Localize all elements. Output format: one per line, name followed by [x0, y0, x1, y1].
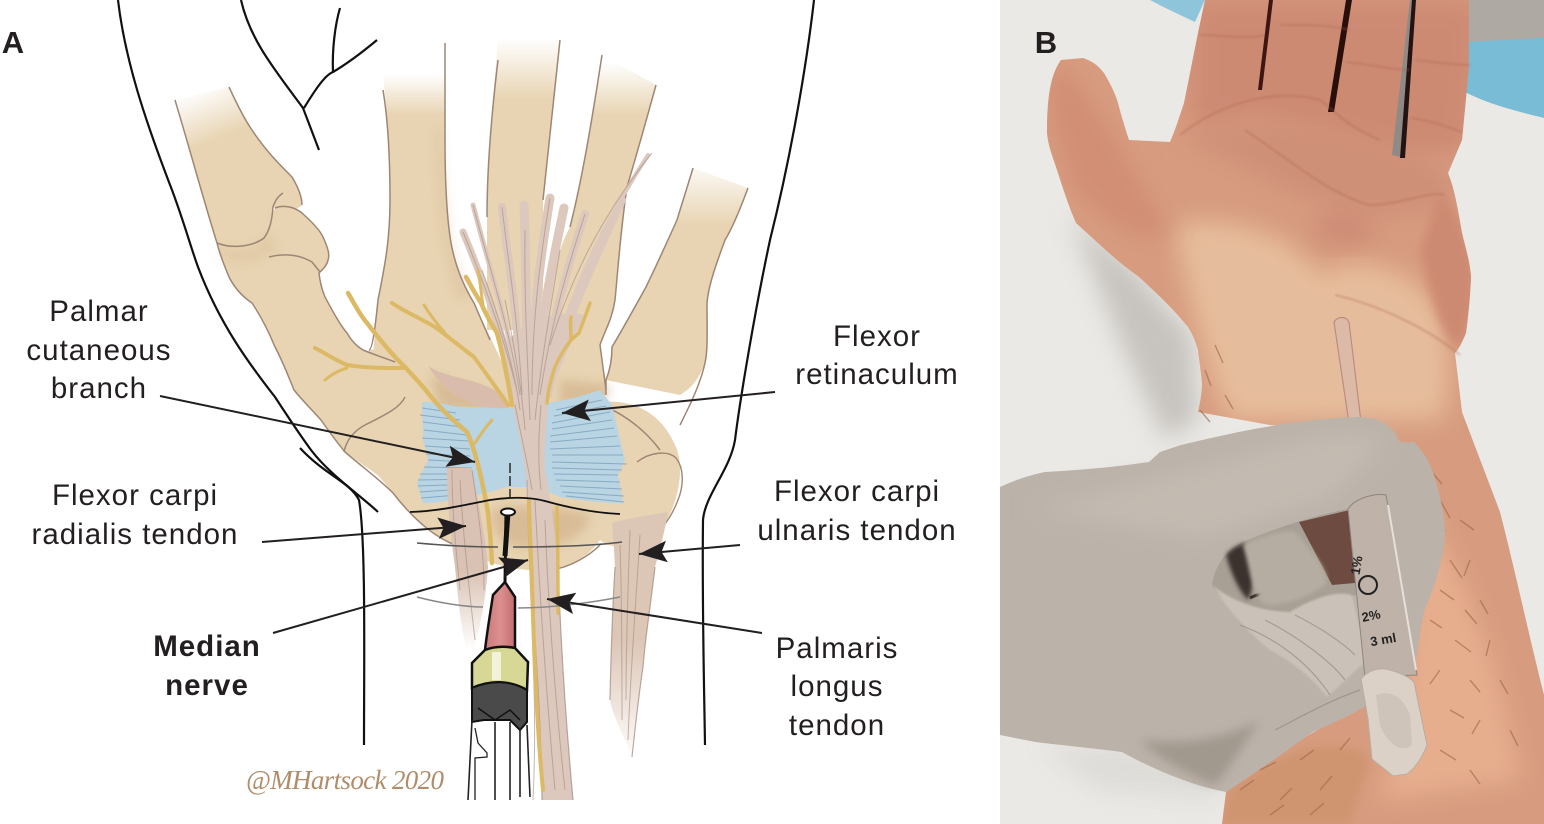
label: panel letter B: B [1035, 25, 1057, 60]
label: Flexor carpi ulnaris tendon [757, 475, 957, 547]
label: panel letter A: A [2, 25, 24, 60]
label: Median nerve: nerve [165, 669, 249, 702]
panel: B clinical photograph [1000, 0, 1544, 824]
label: Flexor carpi ulnaris tendon: ulnaris tendon [757, 514, 957, 547]
illustration: skin crease lines [410, 498, 622, 608]
arrow: median nerve [273, 560, 528, 633]
label: Flexor carpi radialis tendon: radialis tendon [32, 518, 238, 551]
label: Median nerve [153, 630, 261, 702]
label: Flexor carpi ulnaris tendon: Flexor carpi [774, 475, 940, 508]
illustration: palmaris longus tendon [452, 153, 655, 800]
illustration: flexor retinaculum [417, 390, 627, 503]
label: Palmar cutaneous branch: cutaneous [26, 334, 172, 367]
arrow: flexor carpi radialis tendon [262, 526, 466, 542]
panel: A anatomical illustration [2, 0, 959, 800]
illustration: palmaris fan [428, 366, 508, 408]
arrow: palmar cutaneous branch [160, 396, 475, 462]
label: Flexor carpi radialis tendon: Flexor carpi [52, 479, 218, 512]
photo: hand and forearm [1047, 0, 1544, 824]
bone outlines [175, 40, 748, 570]
photo: drape shadows [1065, 223, 1214, 797]
arrow: flexor carpi ulnaris tendon [639, 545, 740, 554]
label: Flexor retinaculum [795, 320, 959, 391]
illustration: hand outline [118, 0, 814, 745]
photo: gloved hand [1000, 417, 1445, 792]
label: Palmaris longus tendon: longus [791, 670, 883, 703]
photo: palm creases [1180, 25, 1470, 355]
label: Palmaris longus tendon [776, 632, 898, 742]
label: Palmaris longus tendon: tendon [789, 709, 885, 742]
glove opening [1212, 509, 1356, 612]
photo: syringe barrel [1348, 495, 1427, 776]
label: Flexor retinaculum: Flexor [833, 320, 921, 353]
illustration: flexor carpi ulnaris tendon [610, 512, 668, 757]
illustration: syringe [468, 463, 530, 800]
photo: skin tones [1049, 0, 1520, 824]
syringe markings: 2% [1360, 606, 1382, 625]
label: Flexor retinaculum: retinaculum [795, 358, 959, 391]
label: Palmar cutaneous branch [26, 295, 172, 405]
label: Flexor carpi radialis tendon [32, 479, 238, 551]
signature: @MHartsock 2020 [246, 765, 444, 795]
bone shading [218, 130, 610, 548]
arrow: palmaris longus tendon [547, 599, 762, 633]
illustration: nerves [315, 270, 590, 790]
photo: needle hub [1334, 316, 1361, 418]
photo: finger gaps [1258, 0, 1416, 158]
label: Palmar cutaneous branch: branch [51, 372, 147, 405]
arrow: flexor retinaculum [562, 392, 775, 413]
label: Palmar cutaneous branch: Palmar [49, 295, 149, 328]
photo: drape background [1000, 0, 1544, 824]
photo: blue pad and grey table [1150, 0, 1544, 118]
syringe markings: 3 ml [1369, 630, 1397, 649]
label: Palmaris longus tendon: Palmaris [776, 632, 898, 665]
illustration: finger and thumb bones [175, 40, 748, 570]
photo: forearm hair [1200, 345, 1518, 815]
label: Median nerve: Median [153, 630, 261, 663]
syringe markings [1351, 556, 1396, 646]
illustration: flexor carpi radialis tendon [447, 468, 488, 660]
syringe markings: 1% [1348, 554, 1366, 576]
